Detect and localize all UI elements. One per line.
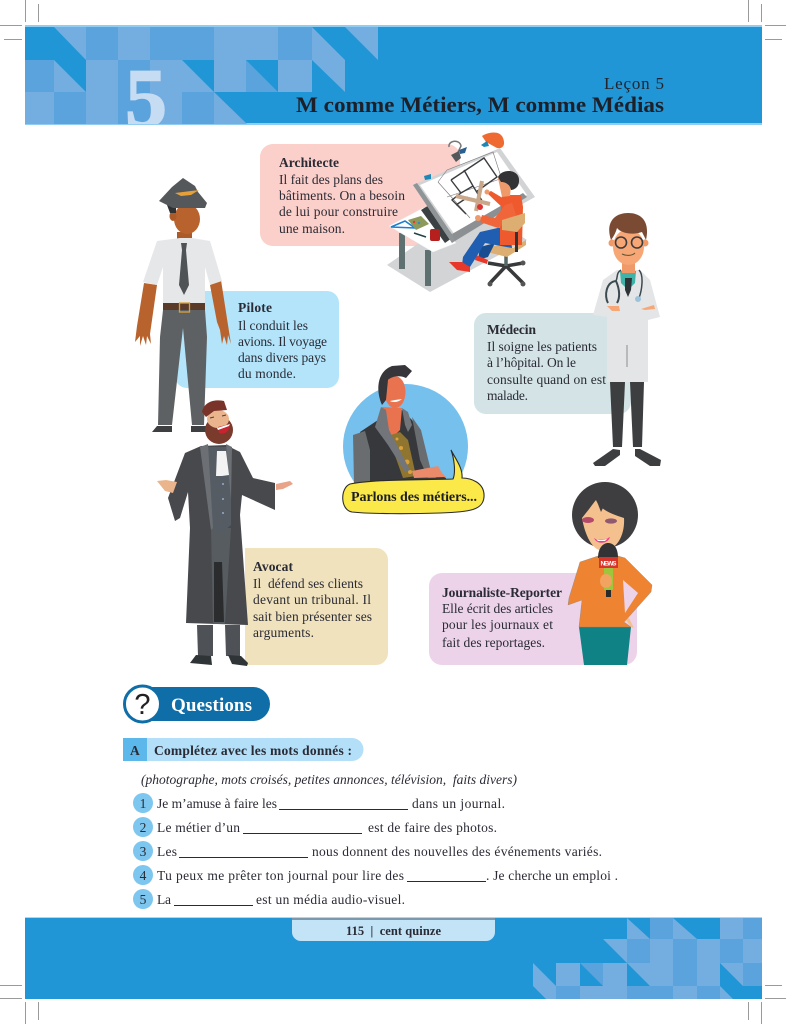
page number tab (292, 918, 495, 941)
lesson title: M comme Métiers, M comme Médias (296, 92, 664, 117)
shirt (487, 191, 506, 210)
lesson label: Leçon 5 (604, 74, 664, 93)
supplies (391, 221, 415, 228)
icon: pilot (135, 178, 231, 432)
question 3: Les (157, 844, 177, 859)
icon: question mark (124, 686, 160, 722)
trousers (478, 243, 495, 260)
question 1: dans un journal. (412, 796, 505, 811)
chair (488, 252, 523, 283)
question 2: est de faire des photos. (368, 820, 497, 835)
panel: médecin (474, 313, 631, 414)
chapter number: 5 (125, 52, 167, 145)
panel: architecte: bâtiments. On a besoin (279, 188, 405, 203)
panel: architecte: de lui pour construire (279, 204, 398, 219)
panel: avocat: arguments. (253, 625, 314, 640)
callout: parlons des métiers: Parlons des métiers... (351, 490, 477, 505)
panel: avocat: Il défend ses clients (253, 576, 363, 591)
heading: questions (124, 686, 270, 722)
icon: presenter in blue circle (343, 365, 468, 483)
exercise heading (123, 738, 364, 761)
lamp (449, 141, 461, 152)
panel: journaliste-reporter: fait des reportages. (442, 635, 545, 650)
question 2: Le métier d’un (157, 820, 240, 835)
panel: architecte: Il fait des plans des (279, 172, 383, 187)
heading: questions: Questions (171, 695, 252, 716)
exercise heading: Complétez avec les mots donnés : (154, 743, 352, 758)
icon: lawyer (157, 400, 293, 666)
panel: médecin: consulte quand on est (487, 372, 606, 387)
panel: avocat: devant un tribunal. Il (253, 592, 371, 607)
icon: question mark: ? (134, 689, 151, 721)
panel: médecin: à l’hôpital. On le (487, 355, 576, 370)
question 5: 5 (140, 892, 147, 907)
panel: médecin: malade. (487, 388, 528, 403)
question 3 (133, 841, 602, 861)
question 3: nous donnent des nouvelles des événements variés. (312, 844, 602, 859)
question 4: . Je cherche un emploi . (486, 868, 618, 883)
question 2 (133, 817, 497, 837)
question 1: 1 (140, 796, 146, 811)
panel: pilote: Pilote (238, 300, 272, 315)
panel: pilote (175, 291, 339, 388)
callout: parlons des métiers (343, 450, 484, 514)
question 4: Tu peux me prêter ton journal pour lire des (157, 868, 404, 883)
panel: avocat: sait bien présenter ses (253, 609, 372, 624)
question 4: 4 (140, 868, 147, 883)
panel: architecte: une maison. (279, 221, 345, 236)
panel: avocat (245, 548, 388, 665)
question 5 (133, 889, 405, 909)
question 2: 2 (140, 820, 146, 835)
footer banner (25, 917, 762, 999)
page number tab: 115 | cent quinze (346, 924, 441, 938)
panel: pilote: dans divers pays (238, 350, 326, 365)
panel: pilote: Il conduit les (238, 318, 308, 333)
exercise heading: A (130, 743, 140, 758)
panel: médecin: Il soigne les patients (487, 339, 597, 354)
panel: pilote: du monde. (238, 366, 296, 381)
panel: journaliste-reporter (429, 573, 637, 665)
question 1: Je m’amuse à faire les (157, 796, 277, 811)
icon: journalist: NEWS (600, 560, 617, 568)
question 3: 3 (140, 844, 147, 859)
helmet (482, 132, 504, 148)
question 5: est un média audio-visuel. (256, 892, 405, 907)
icon: doctor (593, 213, 661, 466)
question 5: La (157, 892, 171, 907)
word list: (photographe, mots croisés, petites annonces, télévision, faits divers) (141, 772, 518, 787)
icon: journalist (568, 482, 652, 665)
panel: architecte: Architecte (279, 155, 339, 170)
panel: journaliste-reporter: Journaliste-Reporter (442, 585, 562, 600)
panel: pilote: avions. Il voyage (238, 334, 327, 349)
panel: médecin: Médecin (487, 322, 536, 337)
icon: architect at drawing board (387, 132, 535, 292)
question 4 (133, 865, 618, 885)
question 1 (133, 793, 505, 813)
panel: avocat: Avocat (253, 559, 294, 574)
panel: journaliste-reporter: Elle écrit des articles (442, 601, 553, 616)
panel: architecte (260, 144, 460, 246)
header banner (25, 25, 762, 125)
panel: journaliste-reporter: pour les journaux et (442, 617, 553, 632)
